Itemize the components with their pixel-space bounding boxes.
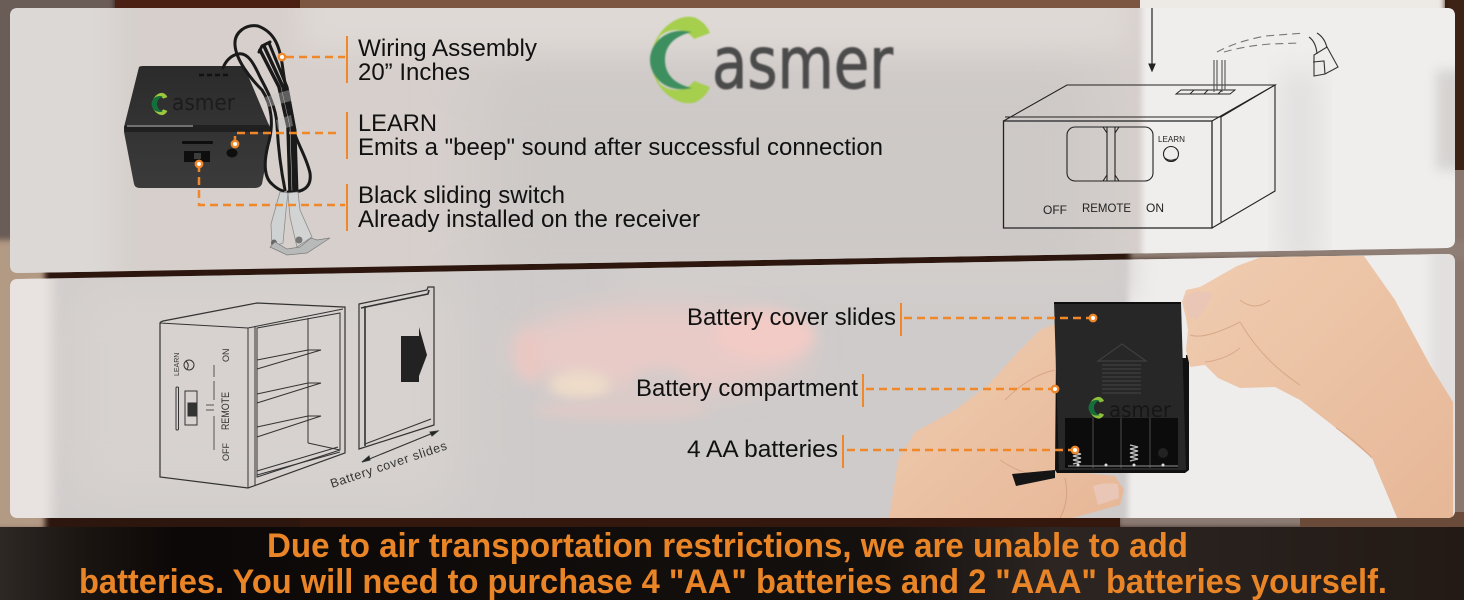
callout: battery cover slides [687,303,1096,336]
photo: left hand [889,322,1124,520]
line drawing: open battery box [160,303,345,488]
logo: Casmer: asmer [712,21,893,105]
line drawing: battery cover: Battery cover slides [328,439,449,491]
panel: battery cover and compartment [10,254,1455,518]
line drawing: receiver front with switch: REMOTE [1082,201,1131,215]
callout: battery cover slides: Battery cover slides [687,304,896,331]
line drawing: receiver front with switch: OFF [1043,203,1067,217]
line drawing: open battery box: REMOTE [220,392,232,430]
callout: battery compartment: Battery compartment [636,375,858,402]
callout: learn [232,110,883,161]
callout: 4 AA batteries: 4 AA batteries [687,436,838,463]
photo: right hand [1182,256,1453,520]
photo: battery box [1012,302,1189,486]
line drawing: receiver front with switch: ON [1146,201,1164,215]
line drawing: receiver front with switch [1004,8,1338,228]
banner: battery notice [0,527,1464,600]
logo: Casmer [650,17,893,105]
ridged arrow on battery cover [1098,344,1146,393]
callout: sliding switch: Black sliding switch [358,182,565,209]
line drawing: receiver front with switch: LEARN [1158,134,1185,144]
callout: wiring assembly: Wiring Assembly [358,35,537,62]
line drawing: open battery box: LEARN [174,353,181,376]
callout: learn: LEARN [358,110,437,137]
callout: wiring assembly: 20” Inches [358,59,470,86]
panel: wiring and learn button [10,8,1455,273]
callout: sliding switch [196,161,700,233]
callout: learn: Emits a "beep" sound after successful connection [358,134,883,161]
banner: battery notice: batteries. You will need to purchase 4 "AA" batteries and 2 "AAA" batteries yourself. [79,563,1387,600]
logo on receiver: asmer [172,91,236,116]
logo on battery cover: asmer [1109,398,1171,422]
callout: 4 AA batteries [687,435,1078,468]
callout: wiring assembly [279,35,537,86]
callout: battery compartment [636,374,1058,407]
line drawing: open battery box: OFF [221,443,231,461]
banner: battery notice: Due to air transportation restrictions, we are unable to add [267,527,1188,565]
line drawing: battery cover [328,287,449,491]
logo on battery cover [1088,397,1171,422]
callout: sliding switch: Already installed on the receiver [358,206,700,233]
product photo: receiver with wires [124,26,330,255]
line drawing: open battery box: ON [221,348,231,362]
